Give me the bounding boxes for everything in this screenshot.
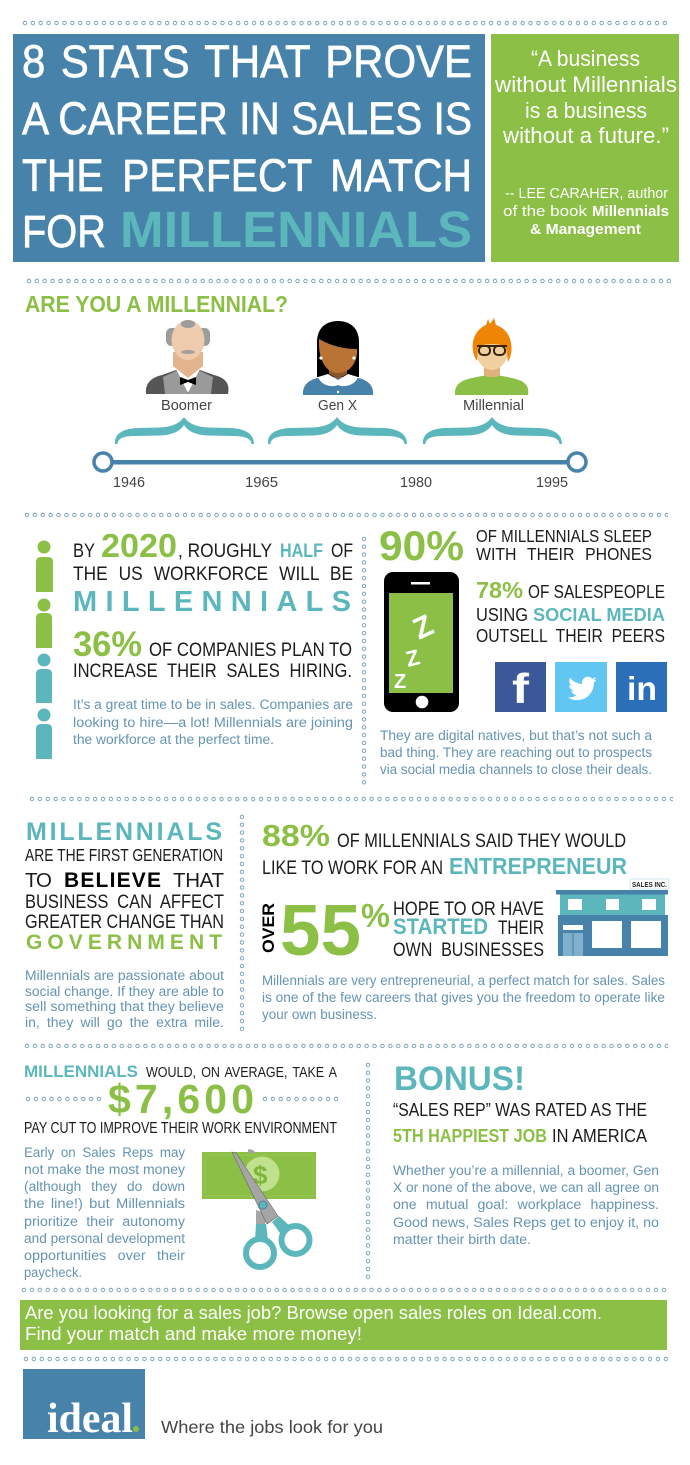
text block: early on: Early on Sales Reps may [24, 1145, 185, 1160]
panel: quote: of the book [503, 203, 588, 220]
timeline: 1946 [113, 475, 145, 491]
stat: 2020 half of workforce: 2020 [101, 527, 177, 564]
text block: digital natives: via social media channels to close their deals. [380, 762, 652, 777]
stat: 36% of companies: 36% [73, 625, 142, 664]
stat: 2020 half of workforce: OF [331, 540, 353, 562]
stat: $7,600 pay cut: MILLENNIALS [24, 1062, 138, 1081]
text block: workplace happiness: X or none of the above, we can all agree on [393, 1180, 659, 1195]
text block: entrepreneurial: is one of the few careers that gives you the freedom to operate like [262, 990, 665, 1005]
panel: quote: Millennials [592, 203, 669, 220]
timeline [94, 453, 586, 491]
icon: twitter [555, 662, 607, 712]
stat: first generation: TO [25, 869, 52, 892]
banner: call to action [20, 1300, 667, 1350]
text block: workplace happiness [393, 1163, 659, 1247]
stat: first generation: MILLENNIALS [26, 818, 222, 846]
stat: first generation: THAT [173, 869, 224, 892]
text block: entrepreneurial: your own business. [262, 1007, 377, 1022]
text block: great time: It’s a great time to be in sales. Companies are [73, 697, 353, 712]
stat: first generation: BELIEVE [64, 869, 161, 892]
heading: are you a millennial: ARE YOU A MILLENNIAL? [25, 291, 288, 317]
stat: 2020 half of workforce: HALF [280, 540, 323, 562]
timeline: 1995 [536, 475, 568, 491]
stat: 90% sleep with phones: OF MILLENNIALS SLEEP [476, 526, 652, 546]
stat: 36% of companies: INCREASE THEIR SALES HIRING. [73, 660, 352, 682]
icon: phone [384, 572, 459, 712]
text block: workplace happiness: matter their birth date. [393, 1232, 531, 1247]
stat: $7,600 pay cut: PAY CUT TO IMPROVE THEIR WORK ENVIRONMENT [24, 1120, 337, 1137]
panel: header title: 8 STATS THAT PROVE [22, 36, 472, 87]
text block: social change: Millennials are passionate about [25, 968, 224, 983]
text block: early on: and personal development [24, 1231, 185, 1246]
stat: bonus happiest job: BONUS! [394, 1060, 525, 1098]
stat: 78% social media: OF SALESPEOPLE [528, 582, 665, 602]
icon: millennial [455, 318, 528, 395]
icon: scissors cutting money [202, 1149, 316, 1267]
stat: 88% entrepreneur [262, 818, 627, 879]
stat: 88% entrepreneur: LIKE TO WORK FOR AN [262, 858, 443, 879]
stat: over 55%: STARTED [393, 914, 488, 939]
stat: over 55%: HOPE TO OR HAVE [393, 899, 544, 920]
text block: early on: the line!) but Millennials [24, 1196, 185, 1211]
stat: 78% social media: SOCIAL MEDIA [533, 605, 665, 625]
icon: scissors cutting money: $ [253, 1160, 268, 1190]
stat: first generation: GOVERNMENT [26, 931, 222, 954]
stat: over 55% [259, 891, 544, 971]
icon: linkedin: in [627, 670, 657, 707]
stat: first generation: ARE THE FIRST GENERATION [25, 845, 223, 865]
text block: entrepreneurial [262, 973, 665, 1022]
stat: 88% entrepreneur: ENTREPRENEUR [449, 853, 627, 879]
icon: boomer [146, 320, 228, 394]
panel: quote: without a future.” [502, 123, 669, 148]
generation labels: Boomer [161, 398, 212, 414]
icon: building [556, 879, 669, 956]
stat: bonus happiest job: 5TH HAPPIEST JOB [393, 1125, 547, 1146]
text block: workplace happiness: Whether you’re a millennial, a boomer, Gen [393, 1163, 659, 1178]
logo: ideal: ideal [47, 1396, 133, 1442]
stat: first generation: GREATER CHANGE THAN [25, 911, 224, 933]
stat: 90% sleep with phones [379, 522, 652, 569]
panel: quote: is a business [525, 98, 647, 123]
panel: header title: THE PERFECT MATCH [22, 150, 472, 201]
panel: header title: FOR [22, 206, 106, 257]
icon: phone: Z [408, 609, 439, 646]
text block: early on: (although they do down [24, 1179, 185, 1194]
stat: over 55%: THEIR [498, 918, 544, 939]
stat: $7,600 pay cut: WOULD, ON AVERAGE, TAKE A [146, 1065, 337, 1081]
stat: bonus happiest job: “SALES REP” WAS RATED AS THE [393, 1099, 647, 1120]
text block: social change: sell something that they believe [25, 999, 224, 1014]
text block: social change [25, 968, 224, 1030]
icon: facebook: f [512, 665, 530, 712]
text block: entrepreneurial: Millennials are very entrepreneurial, a perfect match for sales. Sales [262, 973, 665, 988]
icon: facebook [495, 662, 546, 712]
panel: quote: -- LEE CARAHER, author [505, 185, 668, 202]
icon: linkedin [616, 662, 667, 712]
text block: workplace happiness: one mutual goal: workplace happiness. [393, 1197, 659, 1212]
text block: great time: the workforce at the perfect time. [73, 732, 274, 747]
text block: digital natives: They are digital natives, but that’s not such a [380, 728, 652, 743]
panel: header title [13, 34, 485, 262]
text block: early on [24, 1145, 186, 1280]
stat: over 55%: OWN BUSINESSES [393, 940, 544, 961]
stat: 2020 half of workforce: BY [73, 540, 95, 562]
stat: 2020 half of workforce: THE US WORKFORCE WILL BE [73, 563, 353, 585]
stat: first generation [25, 818, 224, 954]
panel: header title: MILLENNIALS [120, 201, 472, 258]
panel: quote [491, 34, 679, 262]
icon: building: SALES INC. [632, 880, 667, 889]
stat: 36% of companies: OF COMPANIES PLAN TO [149, 639, 352, 661]
text block: great time [73, 697, 353, 747]
generation labels: Gen X [318, 398, 357, 414]
text block: workplace happiness: Good news, Sales Reps get to enjoy it, no [393, 1215, 659, 1230]
icon: phone: Z [403, 644, 422, 672]
text block: early on: opportunities over their [24, 1248, 186, 1263]
panel: quote: without Millennials [494, 72, 677, 97]
generation labels [161, 398, 524, 414]
text block: digital natives [380, 728, 652, 777]
panel: quote: “A business [531, 46, 640, 71]
icon: gen x [303, 321, 373, 395]
stat: 88% entrepreneur: 88% [262, 818, 330, 853]
icon: phone: Z [394, 671, 406, 693]
stat: $7,600 pay cut [24, 1062, 340, 1137]
stat: over 55%: 55 [280, 891, 361, 971]
stat: 36% of companies [73, 625, 352, 682]
logo: ideal [23, 1369, 145, 1442]
timeline: 1980 [400, 475, 432, 491]
stat: over 55%: % [361, 897, 390, 934]
tagline: Where the jobs look for you [161, 1417, 383, 1437]
stat: 2020 half of workforce: MILLENNIALS [73, 586, 351, 618]
text block: digital natives: bad thing. They are reaching out to prospects [380, 745, 652, 760]
generation labels: Millennial [463, 398, 524, 414]
text block: early on: prioritize their autonomy [24, 1214, 185, 1229]
text block: social change: in, they will go the extra mile. [25, 1015, 224, 1030]
panel: quote: & Management [530, 221, 641, 238]
text block: social change: social change. If they are able to [25, 984, 224, 999]
panel: header title: A CAREER IN SALES IS [22, 93, 472, 144]
stat: first generation: BUSINESS CAN AFFECT [25, 891, 224, 913]
braces [115, 417, 562, 444]
stat: 78% social media: 78% [476, 577, 523, 603]
text block: early on: not make the most money [24, 1162, 185, 1177]
timeline: 1965 [245, 475, 278, 491]
banner: call to action: Find your match and make more money! [25, 1323, 362, 1344]
icon: four people [36, 540, 53, 759]
stat: over 55%: OVER [259, 903, 278, 953]
text block: great time: looking to hire—a lot! Millennials are joining [73, 715, 353, 730]
text block: early on: paycheck. [24, 1265, 82, 1280]
stat: 90% sleep with phones: 90% [379, 522, 464, 569]
stat: 78% social media: OUTSELL THEIR PEERS [476, 626, 665, 646]
stat: 2020 half of workforce [73, 527, 353, 618]
stat: bonus happiest job: IN AMERICA [552, 1125, 648, 1146]
stat: 78% social media: USING [476, 605, 528, 625]
stat: $7,600 pay cut: $7,600 [108, 1076, 254, 1122]
stat: 78% social media [476, 577, 665, 646]
banner: call to action: Are you looking for a sales job? Browse open sales roles on Ideal.com. [25, 1302, 602, 1323]
stat: 88% entrepreneur: OF MILLENNIALS SAID THEY WOULD [337, 831, 626, 852]
stat: bonus happiest job [393, 1060, 648, 1146]
stat: 2020 half of workforce: , ROUGHLY [178, 540, 272, 562]
stat: 90% sleep with phones: WITH THEIR PHONES [476, 544, 652, 564]
